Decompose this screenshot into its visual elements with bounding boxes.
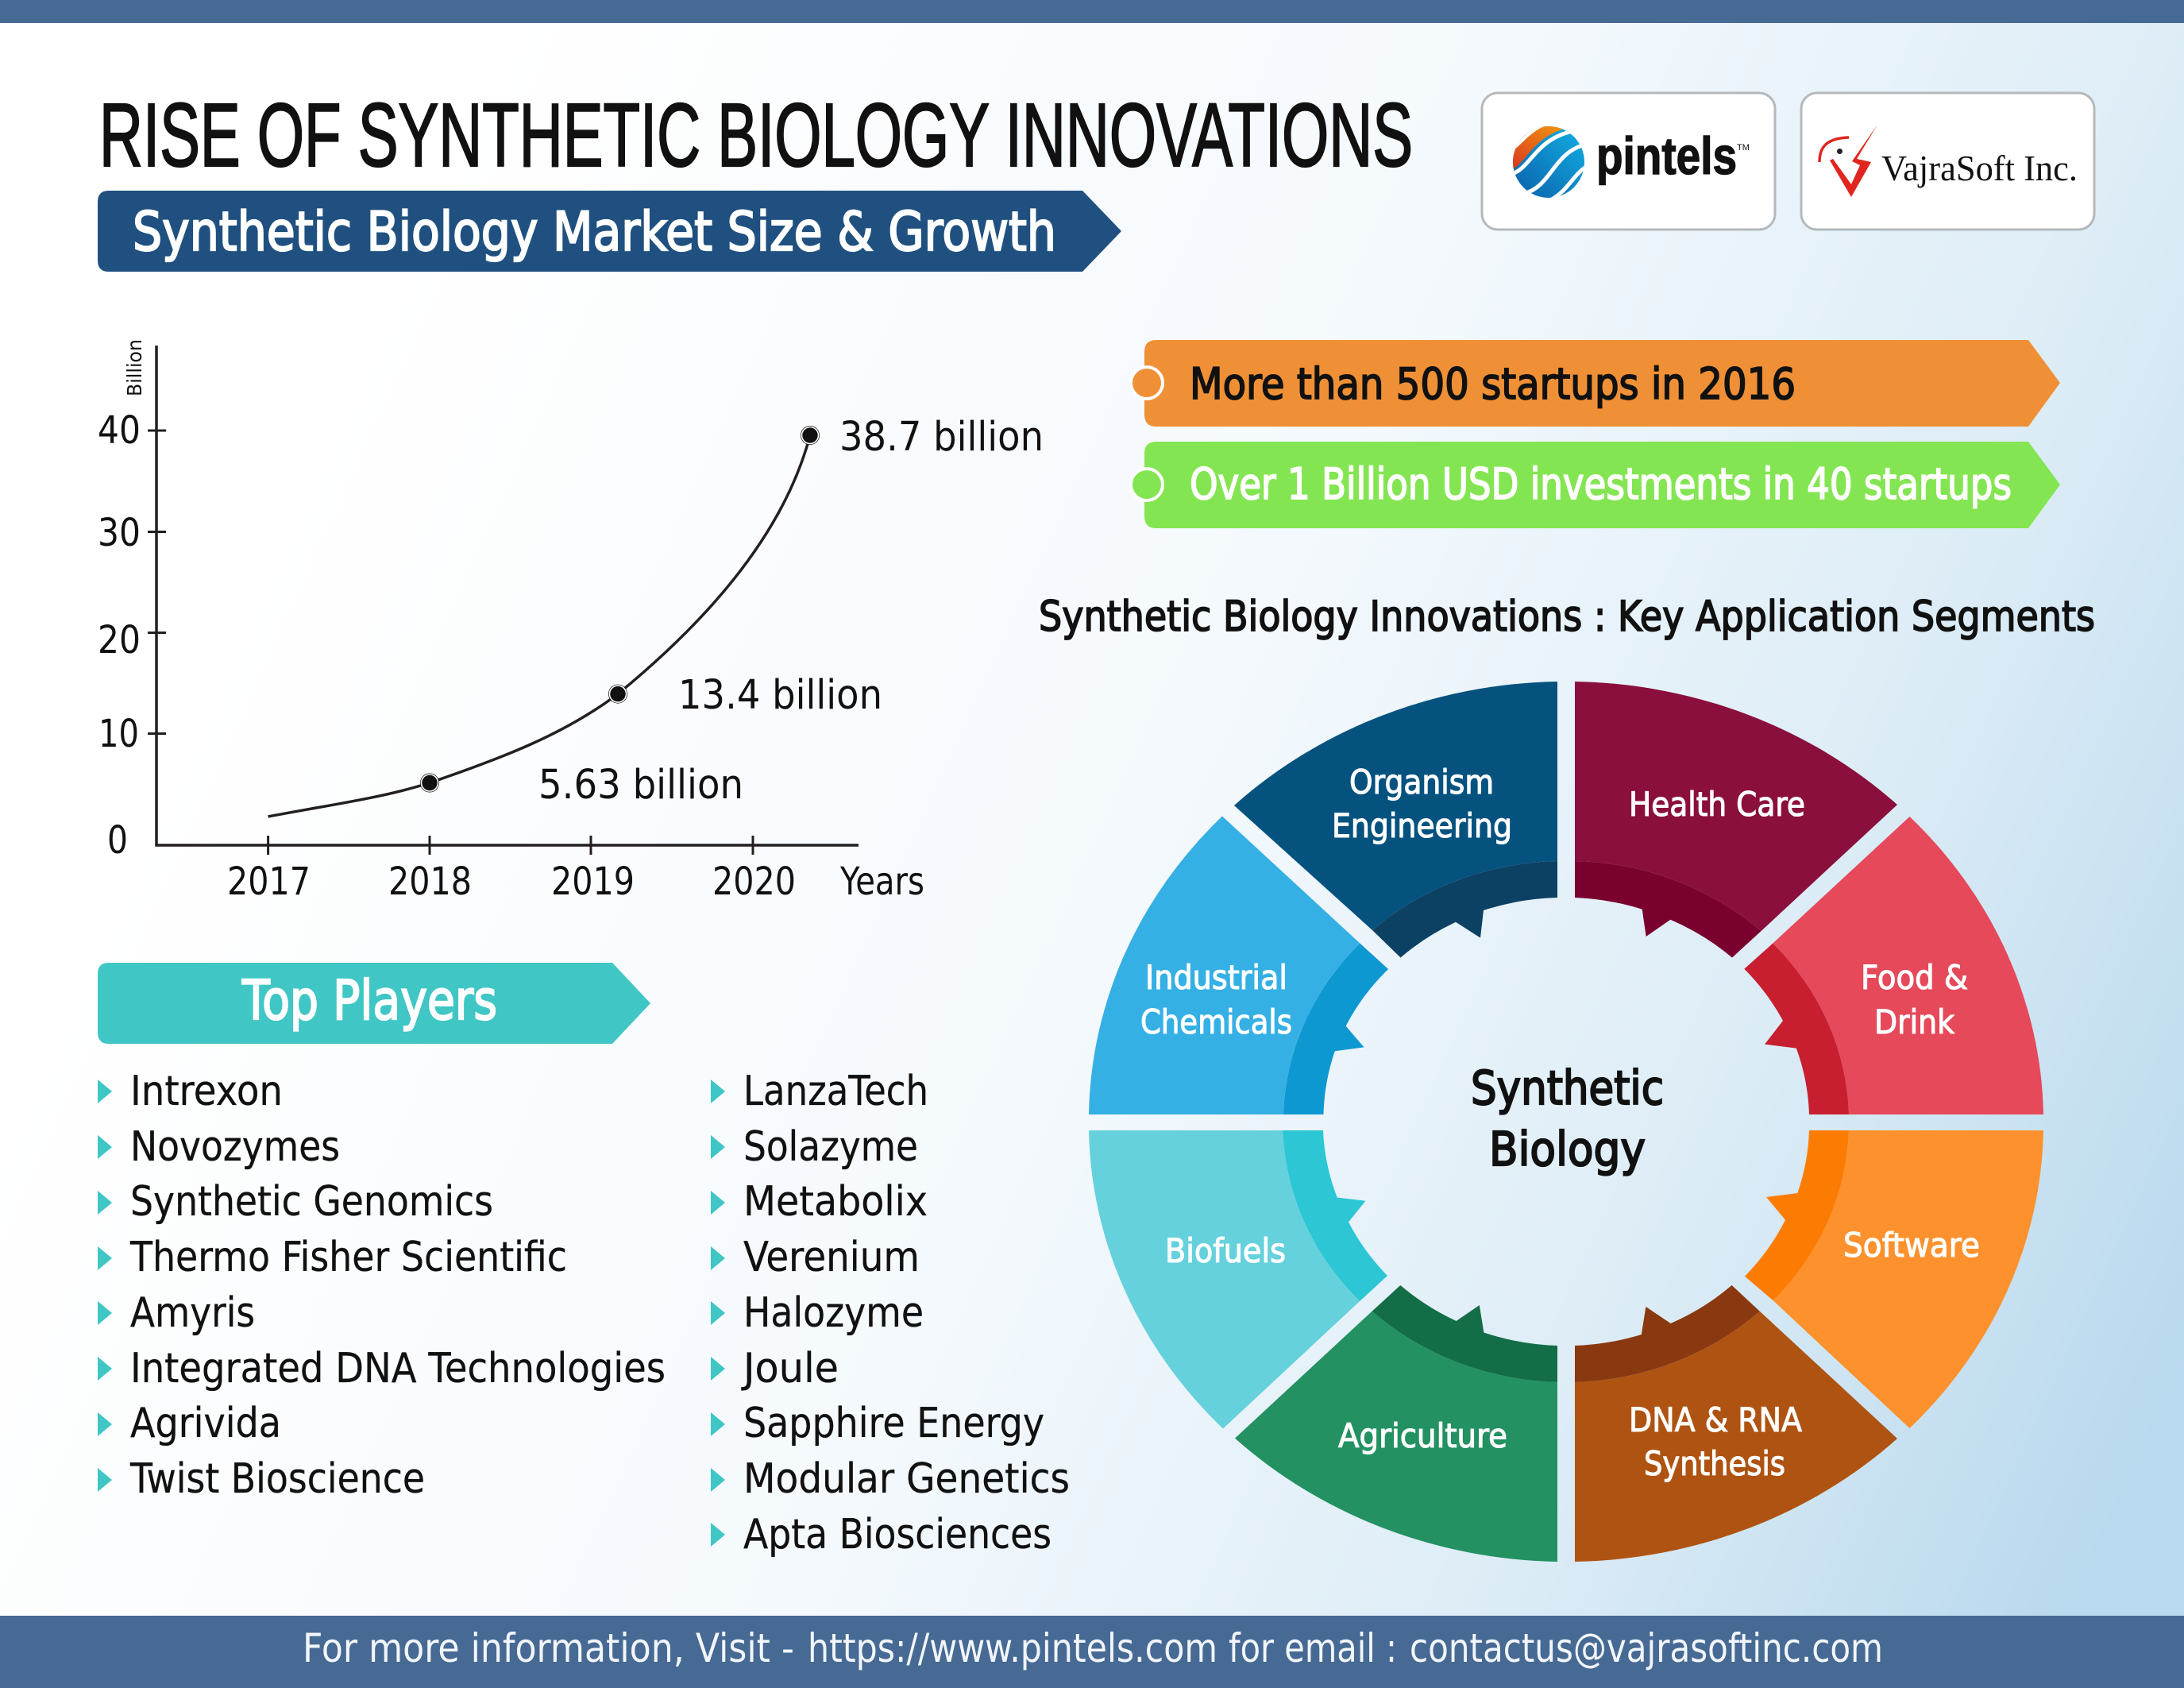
segment: industrial chemicals — [1089, 817, 1388, 1114]
list: top players column 2: Joule — [741, 1345, 839, 1393]
banner: top players: Top Players — [241, 969, 497, 1033]
segment: software — [1745, 1130, 2043, 1428]
list: top players column 1: Thermo Fisher Scientific — [129, 1234, 567, 1281]
segment labels: Engineering — [1332, 806, 1512, 845]
list: top players column 2 — [711, 1068, 1070, 1559]
line chart: market size: 5.63 billion — [538, 762, 743, 809]
segment labels: Agriculture — [1338, 1416, 1507, 1455]
line chart: market size: 38.7 billion — [839, 414, 1044, 461]
segment: organism engineering — [1234, 682, 1557, 958]
list: top players column 2: Verenium — [743, 1234, 920, 1281]
list: top players column 2: LanzaTech — [743, 1068, 928, 1115]
list: top players column 1: Synthetic Genomics — [130, 1178, 493, 1226]
title: RISE OF SYNTHETIC BIOLOGY INNOVATIONS — [99, 85, 1413, 185]
segment labels: Software — [1843, 1226, 1980, 1265]
line chart: market size: 40 — [98, 408, 141, 453]
logo: VajraSoft: VajraSoft Inc. — [1881, 148, 2078, 188]
segment labels: Health Care — [1629, 785, 1805, 824]
list: top players column 1: Integrated DNA Technologies — [130, 1345, 666, 1393]
banner: top players — [98, 963, 650, 1044]
callout: investments — [1131, 442, 2060, 528]
list: top players column 1: Novozymes — [130, 1123, 340, 1171]
footer — [0, 1616, 2184, 1688]
logo: pintels: TM — [1737, 143, 1750, 153]
line chart: market size — [98, 339, 1044, 904]
segment: food and drink — [1744, 817, 2043, 1114]
logo: pintels — [1482, 93, 1775, 230]
segment labels: Drink — [1874, 1002, 1955, 1041]
footer: For more information, Visit - — [303, 1625, 794, 1671]
segment labels: Chemicals — [1140, 1002, 1292, 1041]
line chart: market size: 0 — [107, 818, 128, 863]
center label: Biology — [1489, 1122, 1646, 1176]
line chart: market size: Billion — [123, 339, 146, 396]
line chart: market size: 13.4 billion — [678, 672, 882, 719]
footer: contactus@vajrasoftinc.com — [1410, 1625, 1883, 1671]
line chart: market size: 2019 — [551, 859, 635, 904]
line chart: market size: Years — [839, 859, 924, 904]
center label: Synthetic — [1471, 1060, 1664, 1115]
segment: health care — [1575, 682, 1897, 958]
segment labels: Organism — [1349, 763, 1494, 802]
segment: agriculture — [1235, 1285, 1557, 1562]
segment labels: DNA & RNA — [1629, 1400, 1802, 1439]
segment labels: Industrial — [1145, 958, 1287, 997]
footer: https://www.pintels.com — [808, 1625, 1217, 1671]
list: top players column 2: Apta Biosciences — [743, 1511, 1051, 1559]
list: top players column 1: Intrexon — [130, 1068, 283, 1115]
line chart: market size: 30 — [98, 511, 141, 555]
line chart: market size: 2020 — [712, 859, 796, 904]
callout: investments: Over 1 Billion USD investments in 40 startups — [1190, 459, 2012, 509]
center label — [1471, 1060, 1664, 1176]
segment: biofuels — [1089, 1130, 1387, 1428]
list: top players column 2: Modular Genetics — [743, 1455, 1070, 1503]
segment labels — [1140, 763, 1980, 1483]
list: top players column 2: Sapphire Energy — [743, 1400, 1044, 1447]
line chart: market size: 2018 — [388, 859, 472, 904]
donut chart: application segments — [1089, 682, 2043, 1562]
list: top players column 2: Metabolix — [743, 1178, 928, 1226]
segment: dna and rna synthesis — [1575, 1285, 1897, 1562]
logo: VajraSoft — [1801, 93, 2094, 230]
line chart: market size: 2017 — [227, 859, 311, 904]
segment labels: Synthesis — [1644, 1444, 1785, 1483]
segment labels: Food & — [1861, 958, 1968, 997]
list: top players column 1 — [98, 1068, 666, 1503]
footer: for email : — [1229, 1625, 1397, 1671]
list: top players column 1: Agrivida — [130, 1400, 281, 1447]
line chart: market size: 20 — [98, 618, 141, 662]
list: top players column 2: Halozyme — [743, 1289, 924, 1337]
line chart: market size: 10 — [98, 712, 139, 756]
callout: startups — [1131, 340, 2060, 427]
list: top players column 1: Twist Bioscience — [129, 1455, 425, 1503]
list: top players column 2: Solazyme — [743, 1123, 918, 1171]
callout: startups: More than 500 startups in 2016 — [1190, 359, 1796, 409]
list: top players column 1: Amyris — [130, 1289, 255, 1337]
segment labels: Biofuels — [1165, 1231, 1286, 1270]
logo: pintels: pintels — [1596, 126, 1737, 185]
heading banner: market size and growth: Synthetic Biology Market Size & Growth — [133, 201, 1056, 264]
